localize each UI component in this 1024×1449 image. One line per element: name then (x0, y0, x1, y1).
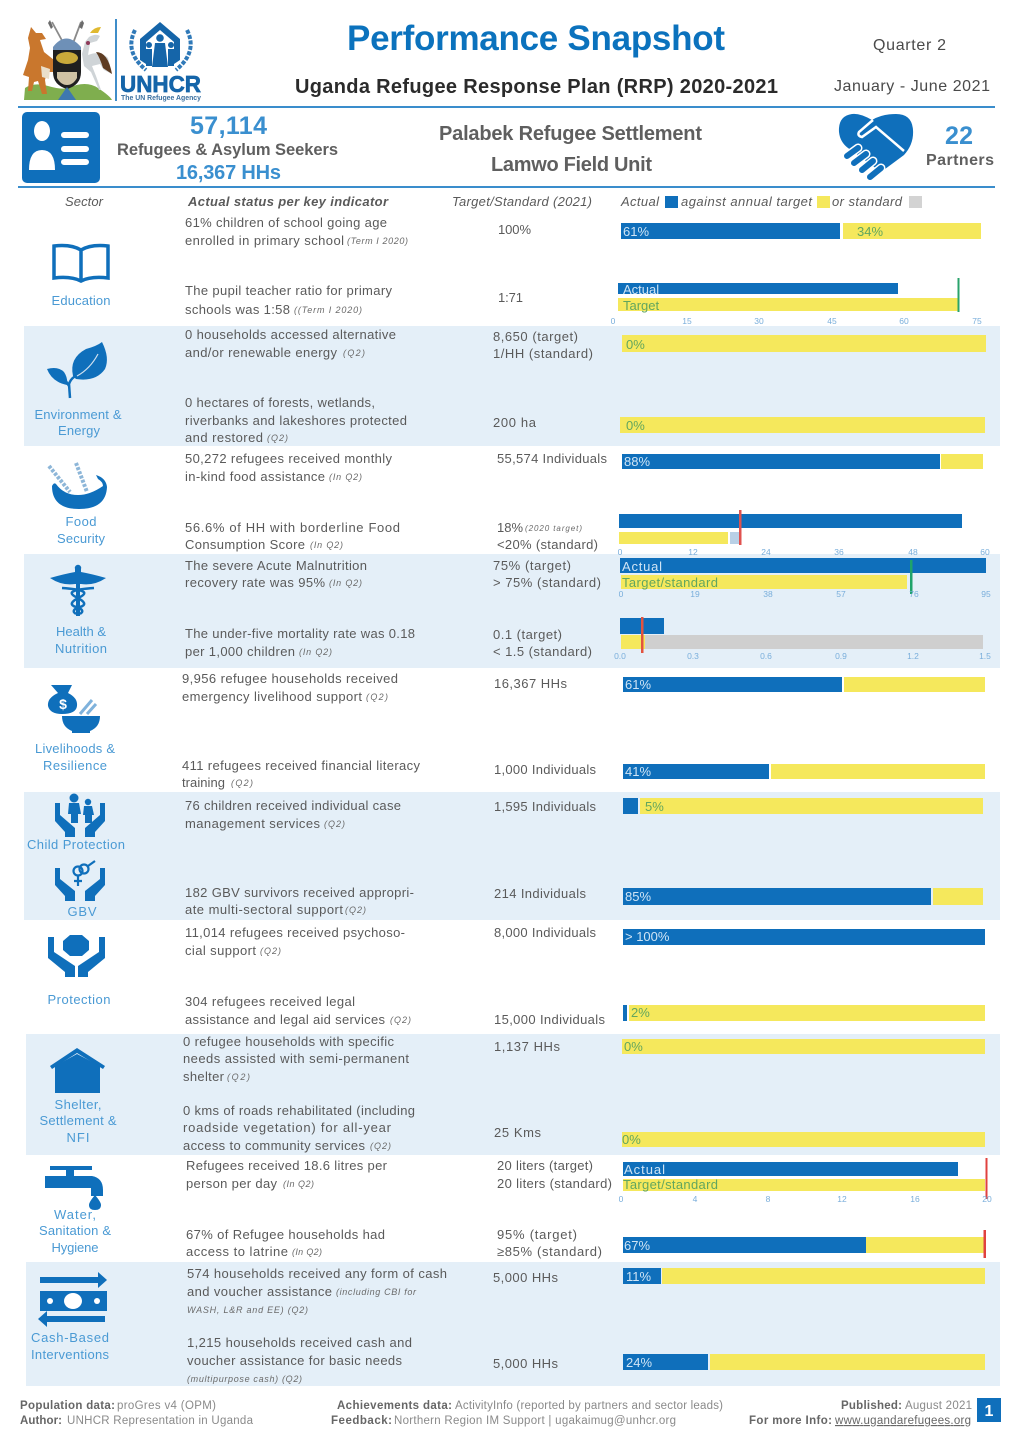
indicator: multipurpose cash: (multipurpose cash) (Q2) (187, 1374, 302, 1384)
indicator: acute malnutrition: 76 (909, 589, 919, 599)
quarter: Quarter 2 (873, 37, 946, 54)
indicator: legal assistance: assistance and legal aid services (185, 1012, 386, 1027)
indicator: pupil teacher ratio: ((Term I 2020) (294, 305, 362, 315)
indicator: renewable energy: 1/HH (standard) (493, 346, 593, 361)
population figures: 57,114 (190, 112, 267, 140)
indicator: acute malnutrition: 75% (target) (493, 558, 571, 573)
indicator: under-five mortality: 0.3 (687, 651, 699, 661)
indicator: litres per person: Refugees received 18.6 litres per (186, 1158, 388, 1173)
indicator: GBV support (185, 885, 983, 917)
sector: protection (48, 935, 110, 1007)
indicator: forests protected (185, 395, 985, 445)
indicator: semi-permanent shelter: 0 refugee households with specific (183, 1034, 394, 1049)
indicator: litres per person: Actual (624, 1162, 665, 1177)
indicator: latrine access: access to latrine (186, 1244, 288, 1259)
sector: education (52, 246, 110, 308)
indicator: legal assistance: 15,000 Individuals (494, 1012, 606, 1027)
indicator: food assistance: 50,272 refugees received monthly (185, 451, 392, 466)
footer: data sources: Author: (20, 1415, 62, 1427)
indicator: multipurpose cash: 24% (626, 1355, 652, 1370)
indicator: roads rehabilitated: 0% (622, 1132, 641, 1147)
indicator: renewable energy: (Q2) (343, 348, 365, 358)
page number (977, 1398, 1001, 1422)
population figures: Refugees & Asylum Seekers (117, 141, 338, 159)
partners count (926, 122, 994, 169)
indicator: psychosocial support: > 100% (625, 929, 670, 944)
indicator: semi-permanent shelter: (Q2) (227, 1072, 250, 1082)
indicator: pupil teacher ratio: 15 (682, 316, 692, 326)
indicator: multipurpose cash: 1,215 households received cash and (187, 1335, 412, 1350)
indicator: under-five mortality: The under-five mortality rate was 0.18 (185, 626, 415, 641)
indicator: legal assistance: 304 refugees received legal (185, 994, 355, 1009)
indicator: case management: (Q2) (324, 819, 345, 829)
indicator: litres per person: 0 (619, 1194, 624, 1204)
sector: health and nutrition (50, 565, 107, 656)
indicator: acute malnutrition (185, 558, 991, 599)
indicator: school enrolment: (Term I 2020) (347, 236, 408, 246)
settlement name: Palabek Refugee Settlement (439, 123, 702, 145)
indicator: legal assistance: (Q2) (390, 1015, 411, 1025)
logo: UNHCR: UNHCR (120, 71, 201, 97)
indicator: case management: 5% (645, 799, 664, 814)
sector: education: Education (52, 293, 110, 308)
footer: published and more info: www.ugandarefugees.org (834, 1415, 971, 1427)
sector: cash-based interventions: Interventions (31, 1347, 110, 1362)
indicator: pupil teacher ratio: 30 (754, 316, 764, 326)
indicator: cash and voucher assistance (187, 1266, 985, 1315)
indicator: litres per person: (In Q2) (283, 1179, 314, 1189)
indicator: financial literacy: training (182, 775, 225, 790)
indicator: GBV support: 214 Individuals (494, 886, 586, 901)
indicator: latrine access: (In Q2) (292, 1247, 322, 1257)
indicator: food assistance: 55,574 Individuals (497, 451, 608, 466)
sector: environment and energy: Energy (58, 423, 100, 438)
indicator: renewable energy (185, 327, 986, 361)
table header: Sector (65, 194, 104, 209)
indicator: school enrolment (185, 215, 981, 248)
sector: shelter settlement and NFI: Settlement & (40, 1113, 117, 1128)
sector: livelihoods and resilience: Resilience (43, 758, 107, 773)
indicator: multipurpose cash: 5,000 HHs (493, 1356, 558, 1371)
indicator: forests protected: 0 hectares of forests, wetlands, (185, 395, 375, 410)
indicator: GBV support: ate multi-sectoral support (185, 902, 343, 917)
sector: food security: Food (66, 514, 96, 529)
indicator: latrine access (186, 1227, 986, 1259)
table header (65, 194, 922, 209)
indicator: semi-permanent shelter: needs assisted with semi-permanent (183, 1051, 409, 1066)
indicator: case management: 76 children received individual case (185, 798, 401, 813)
indicator: renewable energy: 8,650 (target) (493, 329, 578, 344)
footer: data sources (20, 1400, 254, 1427)
indicator: pupil teacher ratio: 60 (899, 316, 909, 326)
indicator: financial literacy: 1,000 Individuals (494, 762, 596, 777)
sector: livelihoods and resilience: $ (59, 696, 67, 712)
sector bands (24, 326, 1000, 1386)
indicator: food assistance: in-kind food assistance (185, 469, 325, 484)
sector: water sanitation and hygiene: Hygiene (52, 1240, 98, 1255)
indicator: food consumption score: 56.6% of HH with borderline Food (185, 520, 400, 535)
indicator: food assistance: (In Q2) (329, 472, 362, 482)
indicator: livelihood support: 16,367 HHs (494, 676, 568, 691)
indicator: food consumption score: 36 (834, 547, 844, 557)
indicator: acute malnutrition: 0 (619, 589, 624, 599)
indicator: cash and voucher assistance: (including CBI for (336, 1287, 417, 1297)
indicator: renewable energy: and/or renewable energy (185, 345, 338, 360)
indicator: pupil teacher ratio: 75 (972, 316, 982, 326)
footer: published and more info (749, 1400, 972, 1427)
indicator: acute malnutrition: 38 (763, 589, 773, 599)
indicator: GBV support: (Q2) (345, 905, 366, 915)
indicator: school enrolment: 34% (857, 224, 883, 239)
indicator: pupil teacher ratio: Target (623, 298, 660, 313)
indicator: litres per person: 16 (910, 1194, 920, 1204)
indicator: under-five mortality: (In Q2) (299, 647, 332, 657)
sector: GBV (55, 861, 105, 919)
footer: data sources: proGres v4 (OPM) (117, 1400, 216, 1412)
sector: health and nutrition: Nutrition (55, 641, 107, 656)
indicator: pupil teacher ratio: 0 (611, 316, 616, 326)
sector: livelihoods and resilience (35, 685, 115, 773)
indicator: acute malnutrition: Actual (622, 559, 662, 574)
indicator: legal assistance (185, 994, 985, 1027)
sector: GBV: GBV (68, 904, 97, 919)
indicator: litres per person: 20 liters (standard) (497, 1176, 612, 1191)
icon: partners handshake heart (839, 114, 913, 177)
indicator: acute malnutrition: 57 (836, 589, 846, 599)
indicator: food assistance (185, 451, 983, 484)
indicator: food consumption score: (2020 target) (525, 524, 582, 533)
logo: Uganda coat of arms (23, 20, 112, 100)
indicator: case management: 1,595 Individuals (494, 799, 596, 814)
sector: water sanitation and hygiene: Water, (54, 1207, 96, 1222)
partners count: 22 (945, 122, 973, 150)
indicator: litres per person: person per day (186, 1176, 278, 1191)
indicator: acute malnutrition: Target/standard (622, 575, 718, 590)
indicator: roads rehabilitated: access to community services (183, 1138, 366, 1153)
period: January - June 2021 (834, 78, 990, 95)
indicator: food consumption score: 18% (497, 520, 523, 535)
indicator: latrine access: 95% (target) (497, 1227, 577, 1242)
footer: published and more info: August 2021 (905, 1400, 972, 1412)
indicator: litres per person: 20 liters (target) (497, 1158, 593, 1173)
indicator: renewable energy: 0% (626, 337, 645, 352)
indicator: multipurpose cash (187, 1335, 985, 1384)
indicator: renewable energy: 0 households accessed alternative (185, 327, 396, 342)
indicator: under-five mortality: 0.1 (target) (493, 627, 562, 642)
footer: achievements and feedback: Northern Region IM Support | ugakaimug@unhcr.org (394, 1415, 676, 1427)
indicator: acute malnutrition: > 75% (standard) (493, 575, 601, 590)
sector: child protection: Child Protection (27, 837, 125, 852)
sector: cash-based interventions: Cash-Based (31, 1330, 109, 1345)
indicator: cash and voucher assistance: 5,000 HHs (493, 1270, 558, 1285)
indicator: litres per person: Target/standard (623, 1177, 718, 1192)
footer: achievements and feedback: Feedback: (331, 1415, 392, 1427)
indicator: forests protected: 200 ha (493, 415, 537, 430)
indicator: cash and voucher assistance: 574 households received any form of cash (187, 1266, 447, 1281)
sector: shelter settlement and NFI: Shelter, (54, 1097, 102, 1112)
indicator: litres per person: 4 (693, 1194, 698, 1204)
footer: published and more info: Published: (841, 1400, 902, 1412)
indicator: food consumption score: 24 (761, 547, 771, 557)
indicator: food consumption score: 0 (618, 547, 623, 557)
indicator: food consumption score: 60 (980, 547, 990, 557)
sector: environment and energy: Environment & (34, 407, 122, 422)
indicator: financial literacy (182, 758, 985, 790)
sector: food security: Security (57, 531, 106, 546)
indicator: psychosocial support: cial support (185, 943, 256, 958)
indicator: latrine access: 67% of Refugee households had (186, 1227, 385, 1242)
indicator: cash and voucher assistance: WASH, L&R and EE) (Q2) (187, 1305, 308, 1315)
indicator: psychosocial support (185, 925, 985, 958)
indicator: forests protected: 0% (626, 418, 645, 433)
footer: achievements and feedback: Achievements data: (337, 1400, 452, 1412)
indicator: under-five mortality (185, 617, 991, 661)
sector: shelter settlement and NFI: NFI (66, 1130, 90, 1145)
indicator: roads rehabilitated: (Q2) (370, 1141, 391, 1151)
indicator: under-five mortality: per 1,000 children (185, 644, 295, 659)
indicator: food consumption score: Consumption Score (185, 537, 305, 552)
indicator: litres per person: 12 (837, 1194, 847, 1204)
indicator: food consumption score: <20% (standard) (497, 537, 598, 552)
indicator: livelihood support: 9,956 refugee households received (182, 671, 398, 686)
table header: Actual status per key indicator (187, 194, 389, 209)
table header: against annual target (681, 194, 813, 209)
indicator: pupil teacher ratio: 45 (827, 316, 837, 326)
indicator: psychosocial support: 11,014 refugees received psychoso- (185, 925, 405, 940)
indicator: GBV support: 85% (625, 889, 651, 904)
indicator: acute malnutrition: (In Q2) (329, 578, 362, 588)
table header: Actual (620, 194, 660, 209)
indicator: GBV support: 182 GBV survivors received appropri- (185, 885, 414, 900)
indicator: roads rehabilitated: 25 Kms (494, 1125, 542, 1140)
sector: environment and energy (34, 342, 122, 438)
indicator: case management (185, 798, 983, 831)
footer: achievements and feedback: ActivityInfo (reported by partners and sector leads) (455, 1400, 723, 1412)
indicator: financial literacy: 41% (625, 764, 651, 779)
indicator: food consumption score: 48 (908, 547, 918, 557)
indicator: legal assistance: 2% (631, 1005, 650, 1020)
indicator: roads rehabilitated: roadside vegetation) for all-year (183, 1120, 392, 1135)
indicator: financial literacy: 411 refugees received financial literacy (182, 758, 420, 773)
indicator: under-five mortality: 1.2 (907, 651, 919, 661)
indicator: multipurpose cash: voucher assistance for basic needs (187, 1353, 402, 1368)
population figures: 16,367 HHs (176, 162, 281, 184)
indicator: food consumption score: (In Q2) (310, 540, 343, 550)
indicator: financial literacy: (Q2) (231, 778, 253, 788)
indicator: under-five mortality: 1.5 (979, 651, 991, 661)
sector: protection: Protection (48, 992, 110, 1007)
indicator: food assistance: 88% (624, 454, 650, 469)
indicator: psychosocial support: 8,000 Individuals (494, 925, 596, 940)
indicator: litres per person: 8 (766, 1194, 771, 1204)
indicator: pupil teacher ratio: schools was 1:58 (185, 302, 290, 317)
logo divider (115, 19, 117, 101)
indicator: under-five mortality: 0.0 (614, 651, 626, 661)
table header: or standard (832, 194, 903, 209)
indicator: acute malnutrition: 19 (690, 589, 700, 599)
subtitle: Uganda Refugee Response Plan (RRP) 2020-2021 (295, 76, 778, 98)
sector: water sanitation and hygiene: Sanitation & (39, 1223, 111, 1238)
sector: shelter settlement and NFI (40, 1048, 117, 1145)
indicator: livelihood support: 61% (625, 677, 651, 692)
sector: health and nutrition: Health & (56, 624, 106, 639)
indicator: pupil teacher ratio: Actual (623, 282, 659, 297)
indicator: psychosocial support: (Q2) (260, 946, 281, 956)
indicator: under-five mortality: 0.6 (760, 651, 772, 661)
indicator: forests protected: and restored (185, 430, 263, 445)
indicator: under-five mortality: < 1.5 (standard) (493, 644, 592, 659)
indicator: school enrolment: 61% (623, 224, 649, 239)
indicator: semi-permanent shelter: 1,137 HHs (494, 1039, 560, 1054)
sector: child protection (27, 794, 125, 852)
indicator: livelihood support: (Q2) (366, 692, 388, 702)
footer: achievements and feedback (331, 1400, 723, 1427)
table header: Target/Standard (2021) (452, 194, 592, 209)
settlement name: Lamwo Field Unit (491, 154, 652, 176)
indicator: latrine access: 67% (624, 1238, 650, 1253)
indicator: forests protected: (Q2) (267, 433, 288, 443)
indicator: forests protected: riverbanks and lakeshores protected (185, 413, 407, 428)
indicator: roads rehabilitated (183, 1103, 985, 1153)
indicator: school enrolment: 61% children of school going age (185, 215, 387, 230)
indicator: school enrolment: enrolled in primary school (185, 233, 344, 248)
title: Performance Snapshot (347, 19, 725, 58)
indicator: under-five mortality: 0.9 (835, 651, 847, 661)
indicator: acute malnutrition: The severe Acute Malnutrition (185, 558, 367, 573)
settlement name (439, 123, 702, 176)
icon: population card (22, 112, 100, 183)
sector: livelihoods and resilience: Livelihoods & (35, 741, 115, 756)
indicator: semi-permanent shelter: shelter (183, 1069, 225, 1084)
indicator: school enrolment: 100% (498, 222, 531, 237)
indicator: litres per person (186, 1158, 992, 1204)
indicator: acute malnutrition: recovery rate was 95% (185, 575, 325, 590)
indicator: pupil teacher ratio (185, 278, 982, 326)
indicator: latrine access: ≥85% (standard) (497, 1244, 602, 1259)
logo: UNHCR (120, 22, 202, 102)
indicator: livelihood support (182, 671, 985, 704)
indicator: litres per person: 20 (982, 1194, 992, 1204)
logo: UNHCR: The UN Refugee Agency (121, 93, 202, 102)
partners count: Partners (926, 152, 994, 169)
footer: data sources: Population data: (20, 1400, 115, 1412)
sector: food security (49, 463, 107, 546)
indicator: pupil teacher ratio: 1:71 (498, 290, 523, 305)
indicator: case management: management services (185, 816, 320, 831)
sector: water sanitation and hygiene (39, 1166, 111, 1255)
footer: data sources: UNHCR Representation in Uganda (67, 1415, 254, 1427)
indicator: cash and voucher assistance: and voucher assistance (187, 1284, 332, 1299)
indicator: acute malnutrition: 95 (981, 589, 991, 599)
indicator: livelihood support: emergency livelihood support (182, 689, 362, 704)
indicator: cash and voucher assistance: 11% (626, 1269, 651, 1284)
indicator: food consumption score: 12 (688, 547, 698, 557)
indicator: pupil teacher ratio: The pupil teacher ratio for primary (185, 283, 392, 298)
indicator: food consumption score (185, 510, 990, 557)
indicator: roads rehabilitated: 0 kms of roads rehabilitated (including (183, 1103, 415, 1118)
footer: published and more info: For more Info: (749, 1415, 832, 1427)
indicator: semi-permanent shelter (183, 1034, 985, 1084)
sector: cash-based interventions (31, 1272, 110, 1362)
page number: 1 (985, 1403, 994, 1420)
population figures (117, 112, 338, 184)
indicator: semi-permanent shelter: 0% (624, 1039, 643, 1054)
